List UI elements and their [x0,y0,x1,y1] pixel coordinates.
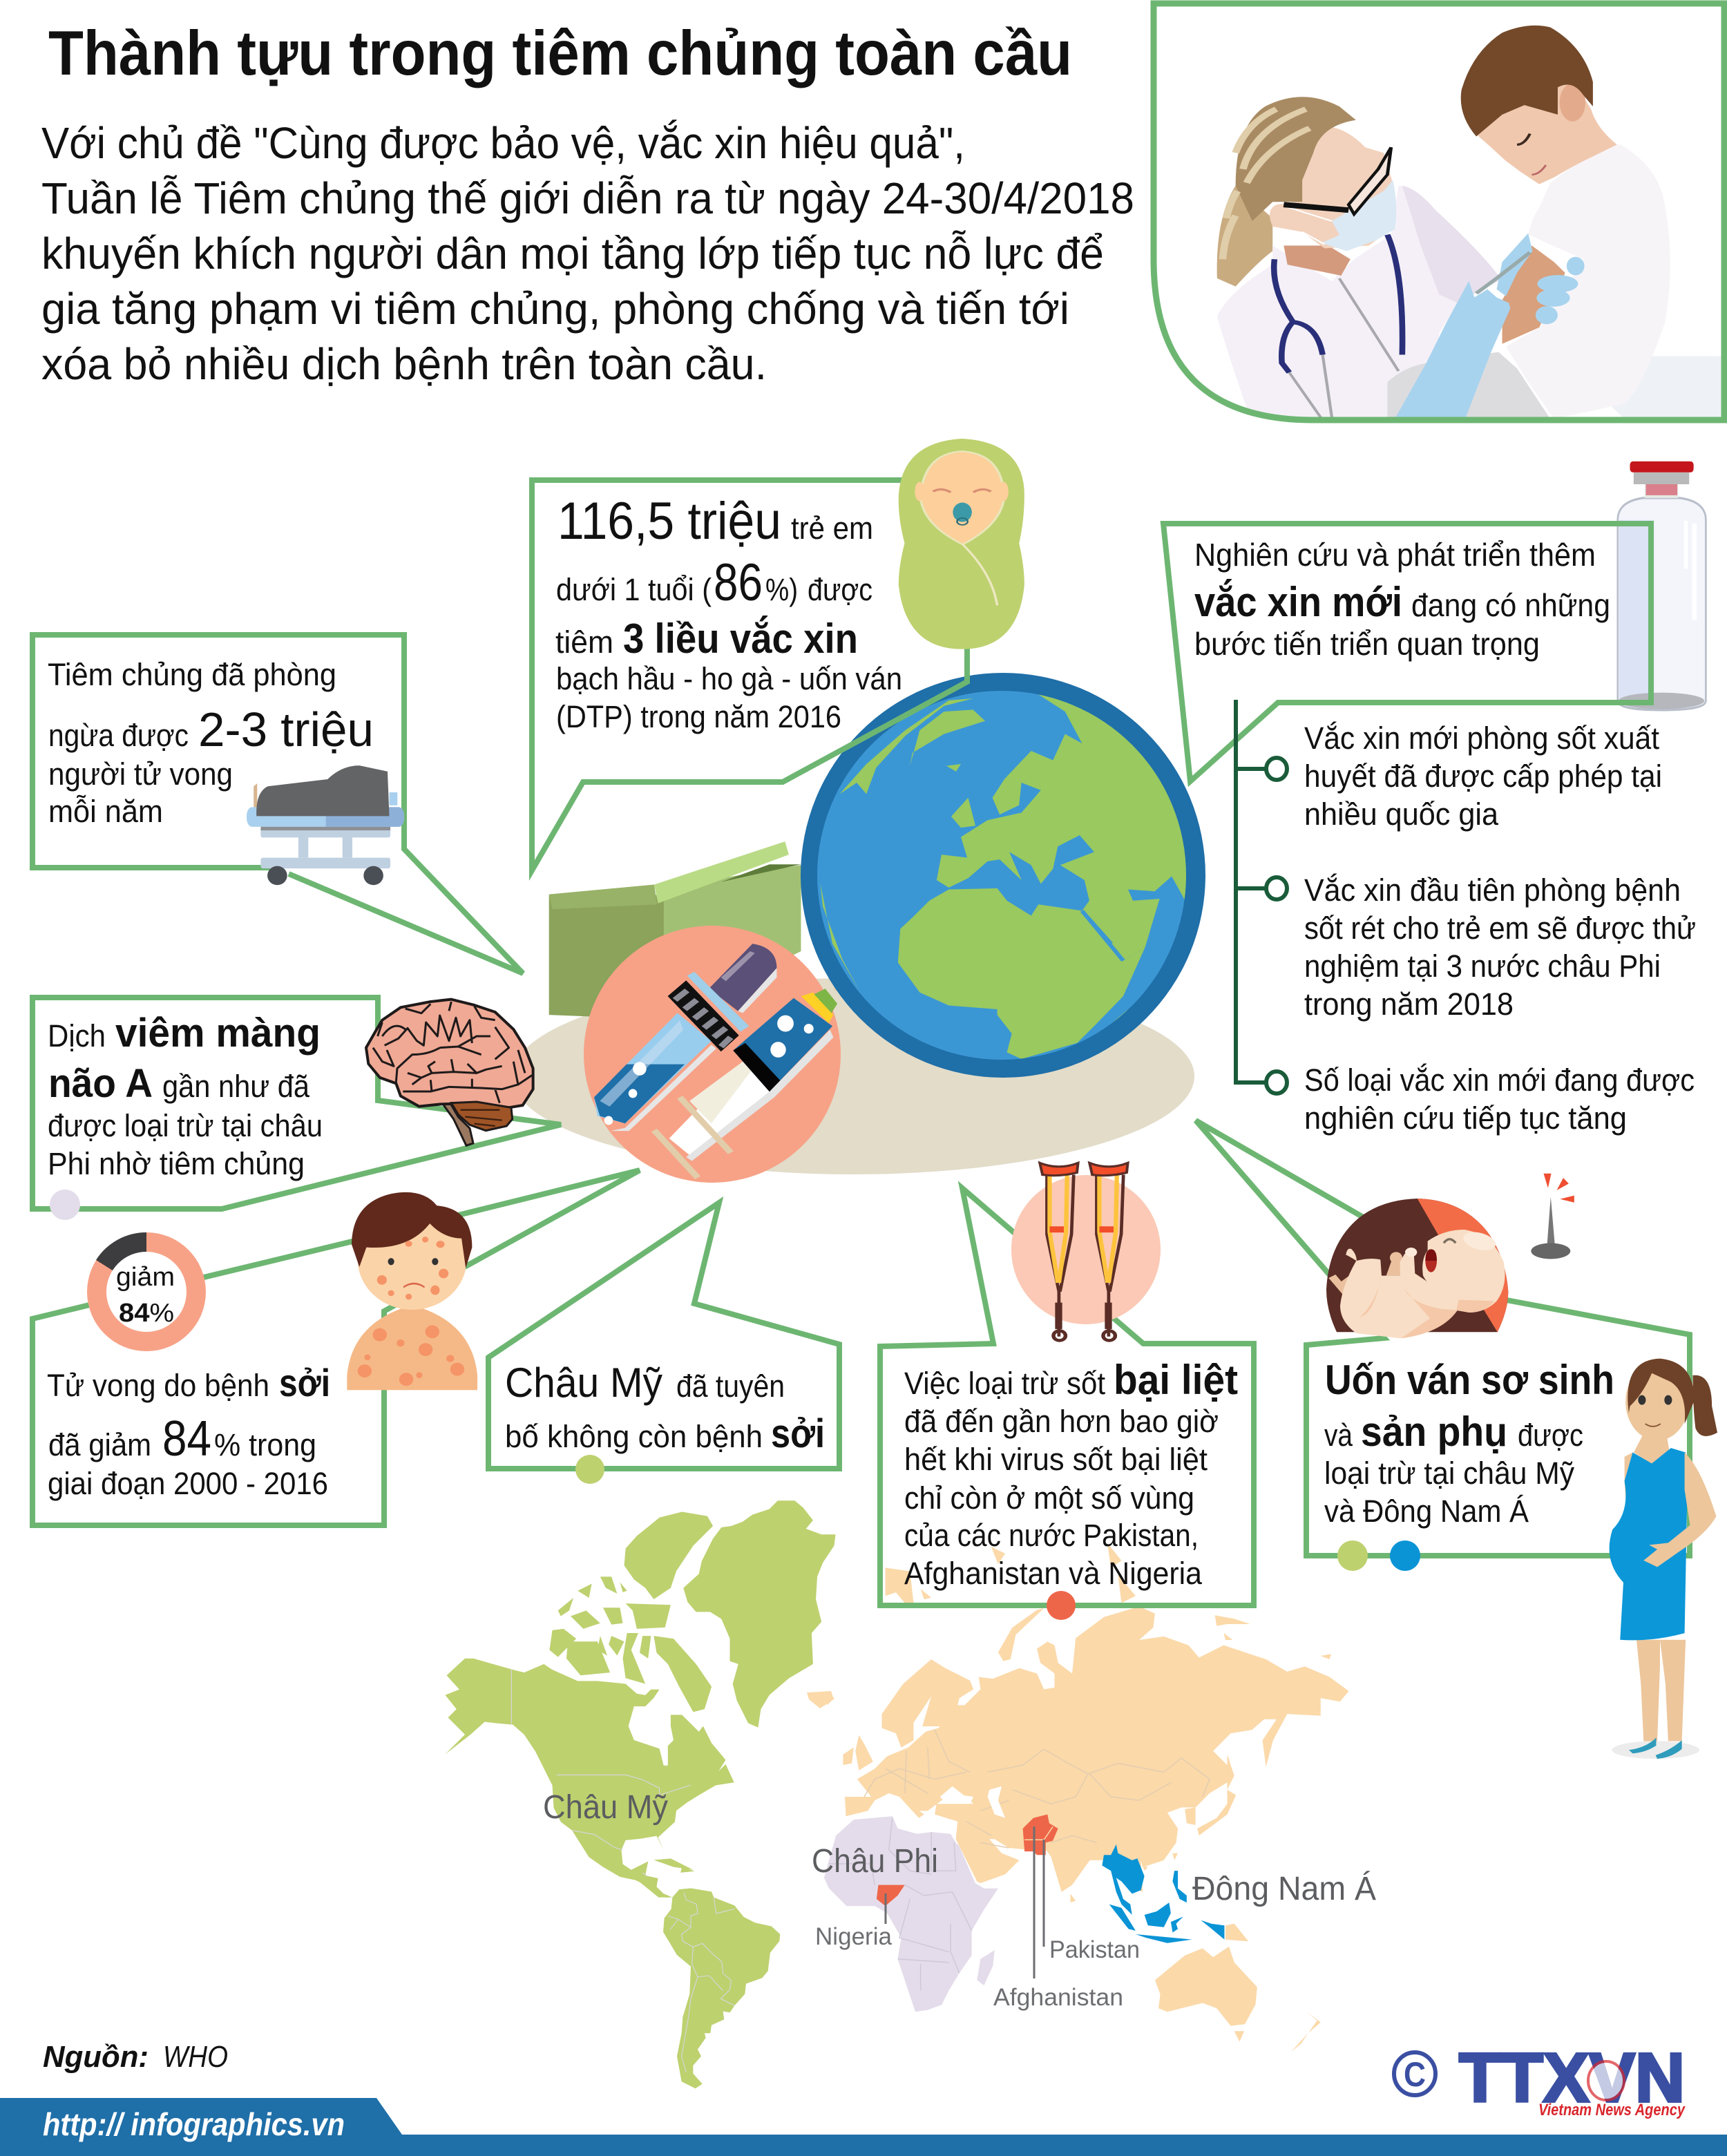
list item: malaria vaccine: trong năm 2018 [1304,986,1514,1022]
logo: TTXVN: C [1404,2055,1426,2094]
map: Eurasia [826,1543,1349,2052]
callout: tetanus with baby and pregnant woman: loại trừ tại châu Mỹ [1324,1456,1574,1491]
Americas colour dot [1337,1540,1368,1571]
callout: measles with donut and child [32,1170,640,1525]
text: meningitis: Dịch [48,1018,106,1053]
polio colour dot [1047,1591,1076,1620]
list item: research growing: Số loại vắc xin mới đang được [1304,1062,1695,1098]
map label: Africa: Châu Phi [812,1843,938,1880]
callout: Americas measles-free: đã tuyên [676,1368,785,1404]
icon: brain [366,1000,533,1145]
list item: dengue vaccine: nhiều quốc gia [1304,796,1499,832]
text: Americas: Châu Mỹ [505,1360,662,1406]
text: 116.5 million children: được [808,572,872,607]
text: 116.5 million children: (DTP) trong năm 2016 [556,699,841,734]
text: measles: đã giảm [48,1427,151,1462]
footer band with url: http:// infographics.vn [43,2106,345,2142]
map: highlighted South-East Asia [1102,1844,1224,1943]
source [43,2040,228,2074]
donut chart: 84 percent: 84% [119,1299,174,1328]
callout: new vaccines with vial: vắc xin mới [1194,579,1402,625]
map: Iceland [807,1691,834,1708]
icon: nail with warning marks [1531,1174,1574,1259]
callout: polio with crutches [880,1163,1254,1620]
list item: malaria vaccine [1304,872,1696,1022]
icon: stretcher [247,765,404,885]
second crutch [1089,1163,1128,1340]
map label: Americas: Châu Mỹ [543,1789,668,1826]
text: 116.5 million children [555,492,902,734]
text: measles: sởi [279,1361,330,1404]
icon: newborn [1326,1199,1508,1338]
icon: glass vial [1618,461,1706,710]
text: meningitis: viêm màng [115,1011,321,1056]
globe land: Greenland and Arctic [910,709,985,766]
callout: new vaccines with vial [1163,461,1706,781]
callout: children vaccinated with swaddled baby [532,439,1024,870]
text: polio: đã đến gần hơn bao giờ [904,1404,1219,1439]
text: measles: giai đoạn 2000 - 2016 [48,1466,328,1501]
Americas colour dot [575,1455,604,1484]
platter [512,978,1194,1174]
text: polio: Việc loại trừ sốt [904,1366,1105,1401]
icon: pregnant woman [1610,1359,1717,1759]
map label: South-East Asia: Đông Nam Á [1192,1871,1376,1907]
text: 2-3 million: ngừa được [48,718,189,753]
list item: malaria vaccine: sốt rét cho trẻ em sẽ được thử [1304,910,1696,946]
logo: TTXVN: Vietnam News Agency [1538,2101,1686,2119]
intro text block: Với chủ đề "Cùng được bảo vệ, vắc xin hiệu quả", [41,118,965,168]
intro text block: gia tăng phạm vi tiêm chủng, phòng chống và tiến tới [41,284,1069,334]
list item: malaria vaccine: nghiệm tại 3 nước châu Phi [1304,948,1661,984]
callout: deaths prevented with stretcher [32,635,523,973]
intro text block: Tuần lễ Tiêm chủng thế giới diễn ra từ ngày 24-30/4/2018 [41,173,1134,223]
footer band with url [0,2098,1727,2156]
text: new vaccine progress: Nghiên cứu và phát triển thêm [1194,537,1596,573]
text: 116.5 million children: trẻ em [791,511,873,546]
callout: tetanus with baby and pregnant woman: và [1324,1418,1353,1453]
icon: swaddled baby [899,439,1024,649]
intro text block [41,118,1134,389]
text: 2-3 million: mỗi năm [48,794,163,829]
intro text block: khuyến khích người dân mọi tầng lớp tiếp tục nỗ lực để [41,229,1104,278]
list item: research growing: nghiên cứu tiếp tục tăng [1304,1100,1627,1136]
callout: tetanus with baby and pregnant woman [1196,1120,1717,1759]
callout: Americas measles-free [488,1203,839,1484]
callout: new vaccines with vial: bước tiến triển quan trọng [1194,626,1540,662]
text: measles [47,1361,330,1501]
map label: Afghanistan: Afghanistan [993,1984,1123,2011]
globe land: Eurasia [937,694,1186,960]
map label: Pakistan: Pakistan [1049,1936,1140,1963]
text: tetanus: Uốn ván sơ sinh [1325,1357,1614,1403]
title: Thành tựu trong tiêm chủng toàn cầu [48,19,1072,88]
callout: meningitis A with brain [32,998,561,1220]
donut chart: 84 percent [87,1232,206,1351]
icon: crutches on circle [1011,1163,1161,1340]
text: 2-3 million: 2-3 triệu [198,703,374,756]
text: 116.5 million children: dưới 1 tuổi ( [556,572,712,607]
map: South America [629,1863,780,2088]
list item: research growing [1304,1062,1695,1136]
source: WHO [163,2040,228,2074]
icon: vaccine box [549,841,801,1020]
text: 116.5 million children: 86 [714,553,763,612]
intro text block: xóa bỏ nhiều dịch bệnh trên toàn cầu. [41,339,767,389]
text: meningitis: được loại trừ tại châu [48,1108,323,1143]
callout: tetanus with baby and pregnant woman: được [1518,1418,1583,1453]
callout: new vaccines with vial: đang có những [1411,587,1610,623]
text: meningitis: não A [48,1061,153,1106]
text: 2-3 million [48,657,374,829]
list item: malaria vaccine: Vắc xin đầu tiên phòng bệnh [1304,872,1681,908]
list item: dengue vaccine [1304,721,1662,832]
text: 116.5 million children: bạch hầu - ho gà - uốn ván [556,661,902,696]
text: 2-3 million: người tử vong [48,756,233,792]
panel: photo of doctor vaccinating a boy [1154,3,1727,420]
text: 2-3 million: Tiêm chủng đã phòng [48,657,336,692]
Africa colour dot [50,1190,80,1220]
map: highlighted polio countries [877,1815,1058,1906]
list item: dengue vaccine: Vắc xin mới phòng sốt xuất [1304,721,1659,756]
text: measles: Tử vong do bệnh [47,1368,269,1403]
callout: tetanus with baby and pregnant woman: và Đông Nam Á [1324,1494,1529,1529]
first crutch [1040,1163,1078,1340]
map label: Nigeria: Nigeria [815,1923,893,1950]
map: Africa [824,1816,998,2012]
map: North America and Greenland [439,1500,836,1898]
text: measles: 84 [162,1411,211,1467]
map: Africa, Eurasia and Oceania [824,1543,1349,2052]
logo: TTXVN: TTXVN [1459,2039,1685,2117]
timeline list: vaccine developments [1236,700,1696,1136]
text: polio: của các nước Pakistan, [904,1518,1199,1553]
map: world regions [439,1500,1376,2088]
South-East Asia colour dot [1390,1540,1420,1571]
icon: vaccine vial and syringe on salmon circle [584,926,871,1183]
text: polio [904,1357,1238,1591]
callout: Americas measles-free: bố không còn bệnh [505,1419,763,1454]
text: 116.5 million children: %) [765,572,798,607]
callout: Americas measles-free: sởi [771,1411,825,1456]
text: polio: Afghanistan và Nigeria [904,1556,1203,1591]
text: meningitis [48,1011,323,1181]
text: polio: bại liệt [1114,1357,1238,1403]
text: polio: chỉ còn ở một số vùng [904,1480,1194,1516]
text: 116.5 million children: 116,5 triệu [557,492,781,551]
icon: globe [801,673,1220,1078]
map: inland seas [913,1697,1005,1818]
list item: dengue vaccine: huyết đã được cấp phép tại [1304,759,1662,794]
central illustration: platter, box, vaccines, globe [512,673,1220,1183]
text: polio: hết khi virus sốt bại liệt [904,1442,1208,1477]
globe land: Africa [898,888,1145,1059]
text: 116.5 million children: tiêm [555,624,613,660]
text: measles: % trong [214,1427,316,1462]
text: meningitis: gần như đã [162,1069,310,1104]
text: meningitis: Phi nhờ tiêm chủng [48,1146,305,1181]
callout: tetanus with baby and pregnant woman: sản phụ [1361,1409,1507,1455]
icon: child with measles [347,1192,477,1390]
source: Nguồn: [43,2040,149,2074]
text: 116.5 million children: 3 liều vắc xin [623,616,858,662]
donut chart: 84 percent: giảm [116,1263,175,1292]
